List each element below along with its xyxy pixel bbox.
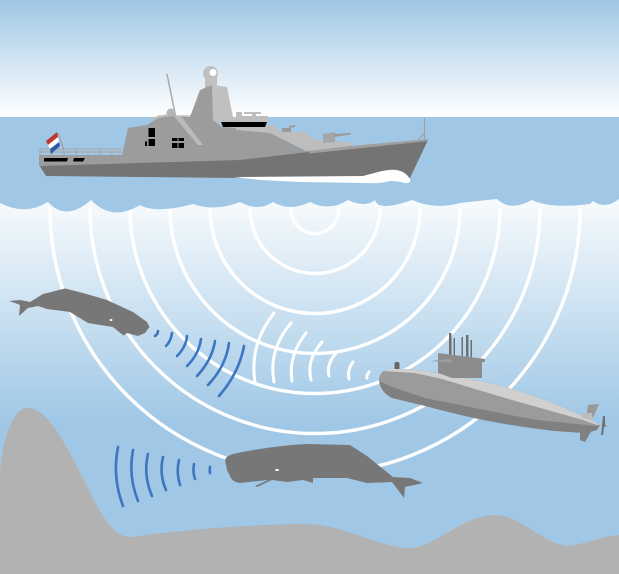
radar mast top: [203, 66, 218, 88]
lower rudder: [580, 430, 592, 442]
seabed terrain: [0, 408, 619, 574]
frigate: [39, 66, 428, 183]
hull dark underside: [379, 369, 600, 433]
superstructure slanted band: [174, 116, 203, 145]
bridge window band: [221, 122, 267, 127]
hull mid tone: [379, 369, 600, 426]
lower whale: [225, 444, 423, 498]
stern railing: [40, 149, 122, 155]
sea surface waves: [0, 190, 619, 212]
superstructure: [39, 85, 308, 166]
bow wake: [234, 170, 410, 183]
stern box: [582, 413, 593, 420]
mid railing and dome: [154, 108, 192, 124]
conning tower: [438, 353, 485, 378]
whale sonar clicks: upper whale: [155, 331, 244, 396]
hull dark: [39, 140, 428, 178]
forward deck: [230, 125, 351, 152]
rear radar equipment: [222, 112, 270, 124]
eye: [275, 469, 279, 471]
sea surface: [0, 117, 619, 212]
submarine: [379, 333, 607, 442]
upper rudder: [586, 404, 599, 418]
sonar pulse arcs from ship: [50, 208, 580, 474]
propeller: [601, 416, 607, 435]
bow mast: [417, 118, 424, 141]
flag: [46, 132, 64, 154]
hull light top: [384, 369, 600, 425]
main mast: [167, 74, 176, 118]
upper whale: [9, 288, 150, 336]
sonar echo arcs from submarine: [254, 313, 369, 382]
hull stripe: [308, 139, 428, 154]
underwater gradient: [0, 198, 619, 574]
stern hull openings: [44, 158, 85, 162]
sky: [0, 0, 619, 117]
tower fin: [430, 359, 453, 363]
masts: [449, 333, 472, 360]
eye: [110, 319, 112, 321]
radar tower light side: [205, 84, 240, 124]
superstructure windows: [145, 128, 184, 148]
forward guns: [282, 125, 351, 143]
whale sonar clicks: lower whale: [116, 447, 210, 506]
snorkel: [394, 362, 400, 370]
